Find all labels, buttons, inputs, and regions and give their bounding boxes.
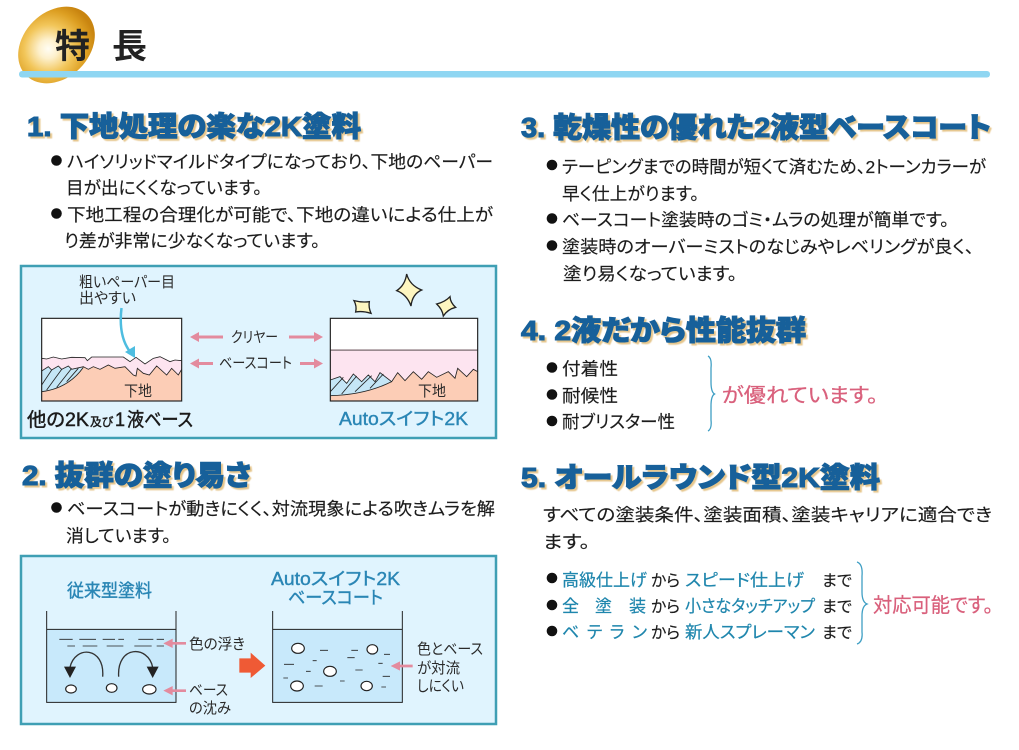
label: AutoSwift base coat bbox=[271, 569, 400, 608]
callout: section 5: 対応可能です。 bbox=[873, 594, 993, 617]
section 4 list: 耐候性 bbox=[562, 386, 618, 406]
section 5 intro bbox=[543, 505, 992, 552]
section 3 bullets: 塗装時のオーバーミストのなじみやレベリングが良く、 bbox=[562, 237, 974, 257]
section 5 list: まで bbox=[822, 573, 852, 590]
section 5 list bbox=[547, 571, 852, 642]
section 5 list: ベテラン bbox=[562, 623, 647, 642]
section 5 list: スピード仕上げ bbox=[685, 571, 804, 590]
caption: other base: 他の bbox=[27, 409, 65, 431]
arrow: transition bbox=[239, 653, 265, 678]
section 5 list: まで bbox=[822, 625, 852, 642]
section 3 bullets: ベースコート塗装時のゴミ・ムラの処理が簡単です。 bbox=[562, 210, 949, 230]
tank: conventional bbox=[47, 611, 176, 702]
label: AutoSwift base coat: ベースコート bbox=[288, 588, 383, 608]
diagram: other base bbox=[42, 318, 182, 401]
section 2 heading: 2. 抜群の塗り易さ bbox=[22, 460, 251, 491]
label: sinking base: の沈み bbox=[189, 700, 231, 717]
icon: sparkles bbox=[354, 274, 456, 316]
panel: convection comparison bbox=[21, 556, 496, 724]
section 1 bullets: ハイソリッドマイルドタイプになっており、下地のペーパー bbox=[67, 152, 493, 172]
section 1 bullets: 目が出にくくなっています。 bbox=[66, 178, 262, 198]
label: low convection: が対流 bbox=[417, 660, 460, 677]
section 2 bullets bbox=[51, 499, 495, 546]
section 3 bullets: テーピングまでの時間が短くて済むため、2トーンカラーが bbox=[562, 157, 987, 177]
brace: section 4 bbox=[708, 356, 714, 431]
section 3 heading: 3. 乾燥性の優れた2液型ベースコート bbox=[521, 112, 991, 143]
section 1 bullets: 下地工程の合理化が可能で、下地の違いによる仕上が bbox=[67, 205, 494, 225]
section 5 list: 全 bbox=[562, 597, 579, 616]
section 5 list: から bbox=[651, 573, 680, 590]
label: floating colour: 色の浮き bbox=[189, 636, 245, 653]
section 5 intro: すべての塗装条件、塗装面積、塗装キャリアに適合でき bbox=[543, 505, 992, 525]
section 2 bullets: ベースコートが動きにくく、対流現象による吹きムラを解 bbox=[67, 499, 495, 519]
header bbox=[3, 0, 990, 99]
brace: section 5 bbox=[857, 562, 867, 644]
section 5 list: 装 bbox=[629, 597, 646, 616]
section 4 list: 付着性 bbox=[562, 359, 618, 379]
section 5 list: 新人スプレーマン bbox=[685, 623, 815, 642]
caption: other base bbox=[27, 409, 193, 431]
arrows: pointers bbox=[163, 639, 413, 695]
arrows: base coat label: ベースコート bbox=[219, 355, 292, 372]
label: substrate left: 下地 bbox=[124, 383, 152, 400]
callout: coarse paper marks: 出やすい bbox=[79, 290, 136, 307]
label: substrate right: 下地 bbox=[418, 383, 446, 400]
section 5 list: 小さなタッチアップ bbox=[685, 597, 815, 616]
title: 特 bbox=[55, 28, 90, 66]
title: 長 bbox=[112, 28, 147, 66]
header rule bbox=[19, 71, 990, 78]
section 5 list: から bbox=[651, 625, 680, 642]
section 5 list: から bbox=[651, 599, 680, 616]
arrows: base coat label bbox=[190, 355, 323, 372]
caption: other base: 2K bbox=[65, 410, 89, 431]
callout: coarse paper marks: 粗いペーパー目 bbox=[79, 274, 175, 291]
label: AutoSwift base coat: Autoスイフト2K bbox=[271, 569, 400, 589]
caption: other base: 及び bbox=[90, 415, 113, 429]
section 3 bullets bbox=[547, 157, 987, 284]
label: sinking base bbox=[189, 682, 231, 717]
section 4 heading: 4. 2液だから性能抜群 bbox=[521, 315, 806, 346]
section 1 bullets bbox=[51, 152, 494, 251]
section 5 list: 塗 bbox=[595, 597, 612, 616]
caption: other base: 液ベース bbox=[127, 409, 193, 431]
section 5 intro: ます。 bbox=[543, 532, 590, 552]
section 3 bullets: 早く仕上がります。 bbox=[562, 184, 699, 204]
title bbox=[55, 28, 147, 66]
caption: other base: 1 bbox=[115, 410, 125, 431]
section 4 list bbox=[547, 359, 675, 432]
section 1 bullets: り差が非常に少なくなっています。 bbox=[64, 231, 320, 251]
label: sinking base: ベース bbox=[189, 682, 228, 699]
section 1 heading: 1. 下地処理の楽な2K塗料 bbox=[27, 111, 361, 142]
section 5 list: 高級仕上げ bbox=[562, 571, 647, 590]
section 3 bullets: 塗り易くなっています。 bbox=[563, 264, 737, 284]
arrows: clear layer label: クリヤー bbox=[231, 329, 278, 346]
diagram: AutoSwift 2K bbox=[330, 274, 478, 401]
label: low convection bbox=[417, 641, 483, 695]
label: low convection: しにくい bbox=[417, 678, 464, 695]
label: conventional paint: 従来型塗料 bbox=[67, 581, 152, 601]
diagram: tanks bbox=[47, 611, 413, 702]
label: low convection: 色とベース bbox=[417, 641, 483, 658]
icon: gold egg bbox=[3, 0, 110, 99]
section 5 list: まで bbox=[822, 599, 852, 616]
panel: paper mark comparison bbox=[21, 266, 496, 438]
tank: AutoSwift bbox=[273, 611, 402, 702]
callout: section 4: が優れています。 bbox=[722, 384, 878, 407]
section 4 list: 耐ブリスター性 bbox=[562, 412, 675, 432]
section 5 heading: 5. オールラウンド型2K塗料 bbox=[521, 462, 880, 493]
callout: coarse paper marks bbox=[79, 274, 175, 358]
arrows: clear layer label bbox=[190, 329, 323, 346]
section 2 bullets: 消しています。 bbox=[66, 526, 171, 546]
caption: AutoSwift: Autoスイフト2K bbox=[339, 409, 468, 429]
